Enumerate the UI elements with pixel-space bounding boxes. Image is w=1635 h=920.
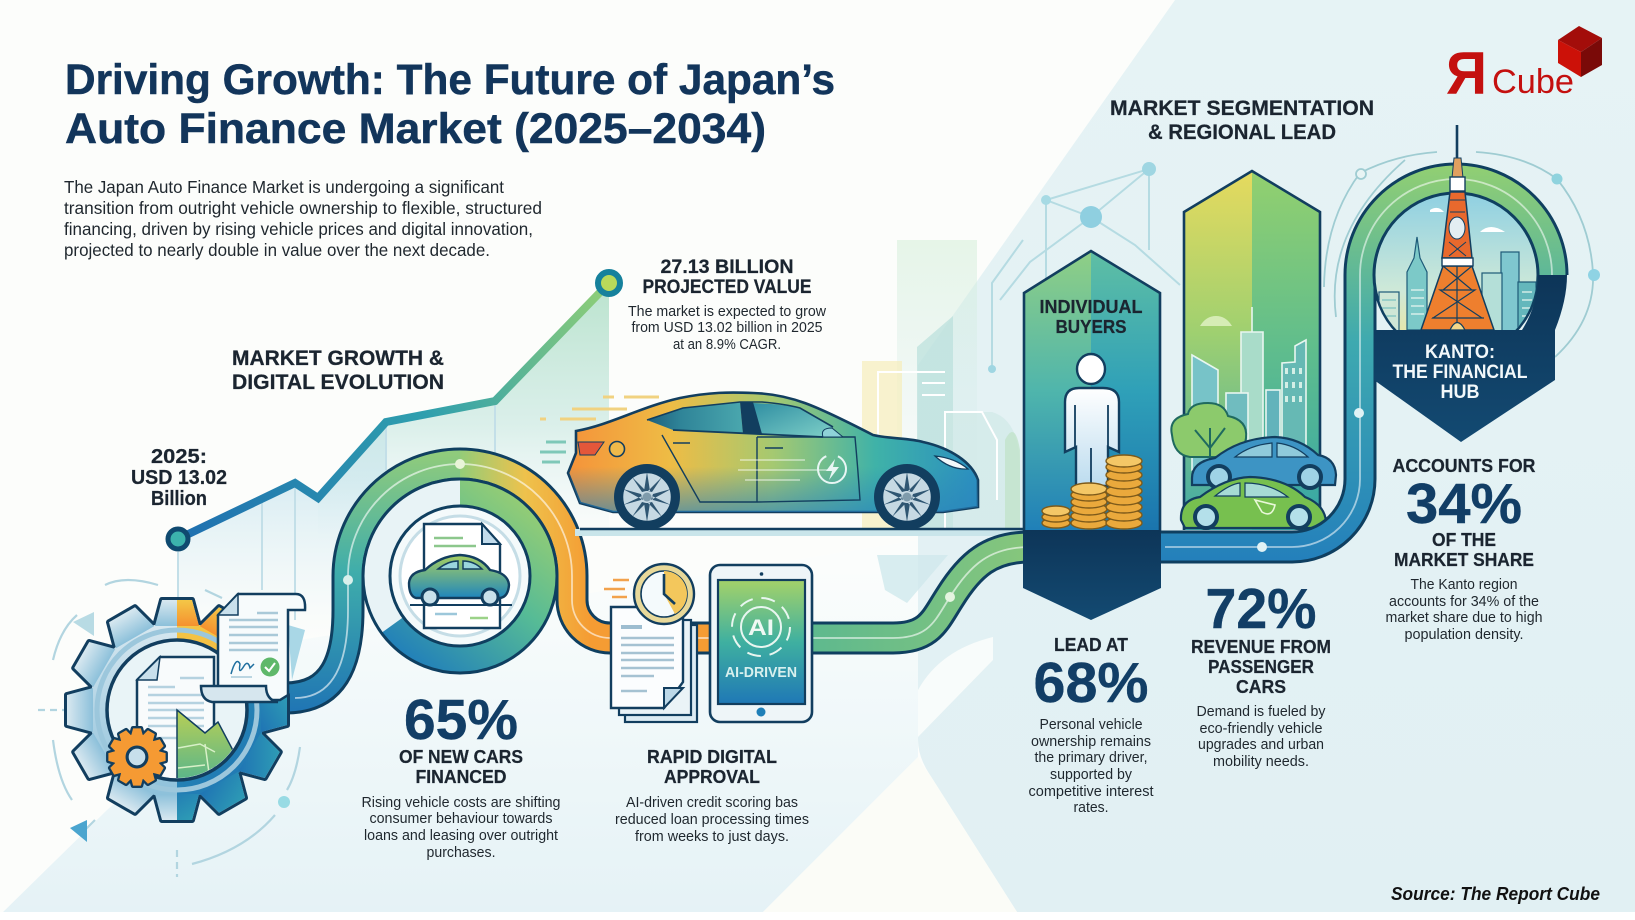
- skyline: [1379, 208, 1536, 333]
- AI label: AI: [748, 615, 774, 640]
- stat: 72 percent: PASSENGER: [1208, 656, 1314, 677]
- intro paragraph: [64, 177, 542, 260]
- stat: 72 percent: mobility needs.: [1213, 753, 1309, 770]
- stat: 72 percent: CARS: [1236, 676, 1286, 697]
- stat: 72 percent: Demand is fueled by: [1196, 703, 1326, 720]
- tree: [1171, 403, 1246, 470]
- network decoration: [988, 162, 1180, 373]
- source note: Source: The Report Cube: [1391, 884, 1600, 904]
- intro paragraph: The Japan Auto Finance Market is undergoing a significant: [64, 177, 504, 197]
- intro paragraph: financing, driven by rising vehicle prices and digital innovation,: [64, 219, 533, 239]
- AI-driven label: AI-DRIVEN: [725, 665, 797, 681]
- banner title: THE FINANCIAL: [1392, 362, 1528, 383]
- stat: 34 percent: MARKET SHARE: [1394, 549, 1534, 570]
- navy base: [1023, 530, 1161, 620]
- 65 percent donut with car document: [363, 479, 557, 673]
- title: Driving Growth: The Future of Japan’s: [65, 56, 835, 104]
- stat: 34 percent: population density.: [1404, 626, 1524, 643]
- documents and clock icon: [604, 564, 697, 722]
- stat: 72 percent: upgrades and urban: [1198, 736, 1324, 753]
- stat: 72 percent: 72%: [1206, 577, 1316, 641]
- stat: 34 percent: OF THE: [1432, 529, 1496, 550]
- gear with documents illustration: [38, 580, 305, 877]
- projected value block: from USD 13.02 billion in 2025: [632, 319, 822, 336]
- projected value block: 27.13 BILLION: [660, 257, 794, 278]
- Kanto pin with Tokyo Tower: [1374, 125, 1567, 442]
- stat: 72 percent: REVENUE FROM: [1191, 636, 1331, 657]
- intro paragraph: transition from outright vehicle ownership to flexible, structured: [64, 198, 542, 218]
- heading: market growth: [232, 347, 444, 394]
- title: Auto Finance Market (2025–2034): [65, 105, 766, 153]
- stat: 72 percent: [1191, 577, 1331, 770]
- stat: 34 percent: accounts for 34% of the: [1389, 593, 1539, 610]
- stat: rapid digital approval: AI-driven credit scoring bas: [626, 794, 798, 811]
- stat: rapid digital approval: [615, 746, 809, 845]
- stat: 68 percent: the primary driver,: [1034, 749, 1148, 766]
- stat: 34 percent: The Kanto region: [1410, 576, 1518, 593]
- stat: 68 percent: ownership remains: [1031, 733, 1151, 750]
- pale cityscape behind car: [862, 240, 1020, 530]
- banner title: HUB: [1440, 382, 1480, 403]
- projected value block: at an 8.9% CAGR.: [673, 336, 781, 353]
- big gear: [67, 600, 287, 820]
- banner title: [1392, 342, 1528, 403]
- stat: 34 percent: [1386, 455, 1542, 643]
- path through tablet: [812, 547, 1030, 638]
- heading: market growth: DIGITAL EVOLUTION: [232, 371, 444, 394]
- green car: [1181, 477, 1326, 528]
- stat: 68 percent: Personal vehicle: [1040, 716, 1142, 733]
- path to Kanto: [1155, 179, 1552, 552]
- individual buyers hexagon: [1023, 251, 1161, 620]
- stat: 65 percent: 65%: [404, 688, 518, 752]
- projected value block: PROJECTED VALUE: [642, 277, 812, 298]
- stat: rapid digital approval: reduced loan processing times: [615, 811, 809, 828]
- intro paragraph: projected to nearly double in value over the next decade.: [64, 240, 490, 260]
- logo: [1446, 26, 1602, 107]
- rear document: [135, 655, 233, 778]
- tablet AI-driven: [710, 565, 812, 722]
- stat: 34 percent: market share due to high: [1386, 609, 1542, 626]
- stat: 34 percent: 34%: [1406, 472, 1522, 536]
- stat: 68 percent: 68%: [1034, 651, 1148, 715]
- hexagon label: [1040, 296, 1142, 337]
- hexagon label: BUYERS: [1056, 316, 1126, 337]
- stat: 68 percent: supported by: [1050, 766, 1132, 783]
- blue car: [1192, 437, 1336, 488]
- icon: clock: [634, 564, 694, 624]
- stat: 65 percent: [362, 688, 560, 861]
- stat: 65 percent: OF NEW CARS: [399, 746, 523, 767]
- growth line chart: [168, 283, 609, 640]
- stat: 72 percent: eco-friendly vehicle: [1200, 720, 1322, 737]
- stat: 68 percent: competitive interest: [1028, 783, 1154, 800]
- end point marker: [598, 272, 620, 294]
- signed document: [201, 594, 305, 702]
- logo: Cube: [1492, 63, 1574, 101]
- city buildings: [1192, 307, 1306, 470]
- icon: coin stacks: [1042, 455, 1142, 529]
- icon: red cube: [1558, 26, 1602, 77]
- logo: Я: [1446, 40, 1487, 107]
- icon: document: [424, 524, 500, 628]
- title: [65, 56, 835, 153]
- start point marker: [168, 529, 188, 549]
- stat: 68 percent: [1028, 634, 1154, 816]
- stat: 68 percent: LEAD AT: [1054, 634, 1129, 655]
- stat: 34 percent: ACCOUNTS FOR: [1392, 455, 1536, 476]
- projected value block: [628, 257, 826, 353]
- serpentine path left and ring: [285, 459, 712, 698]
- heading: 2025 value: Billion: [151, 488, 207, 510]
- icon: small car: [409, 555, 509, 598]
- icon: person: [1065, 354, 1119, 486]
- stat: 65 percent: FINANCED: [416, 766, 506, 787]
- hexagon label: INDIVIDUAL: [1040, 296, 1142, 317]
- Tokyo Tower: [1421, 125, 1494, 330]
- projected value block: The market is expected to grow: [628, 303, 826, 320]
- small orange gear: [108, 728, 166, 786]
- stat: rapid digital approval: RAPID DIGITAL: [647, 746, 777, 767]
- stat: 65 percent: purchases.: [426, 844, 496, 861]
- stat: 65 percent: consumer behaviour towards: [370, 810, 552, 827]
- stat: 65 percent: Rising vehicle costs are shifting: [362, 794, 560, 811]
- stat: rapid digital approval: APPROVAL: [664, 766, 760, 787]
- heading: 2025 value: 2025:: [151, 446, 207, 468]
- decorative dashed arcs: [38, 580, 300, 877]
- stat: rapid digital approval: from weeks to just days.: [635, 828, 789, 845]
- speed lines: [540, 397, 659, 462]
- orbit decoration around Kanto: [1324, 152, 1600, 357]
- big electric car: [540, 393, 1035, 536]
- heading: 2025 value: USD 13.02: [131, 467, 227, 489]
- heading: 2025 value: [131, 446, 227, 510]
- stat: 68 percent: rates.: [1074, 799, 1108, 816]
- heading: market segmentation: & REGIONAL LEAD: [1148, 121, 1336, 144]
- heading: market segmentation: [1110, 97, 1374, 144]
- stat: 65 percent: loans and leasing over outright: [364, 827, 559, 844]
- heading: market segmentation: MARKET SEGMENTATION: [1110, 97, 1374, 120]
- banner title: KANTO:: [1425, 342, 1495, 363]
- navy banner: [1374, 275, 1567, 442]
- heading: market growth: MARKET GROWTH &: [232, 347, 444, 370]
- tall hexagon: passenger cars: [1171, 171, 1336, 530]
